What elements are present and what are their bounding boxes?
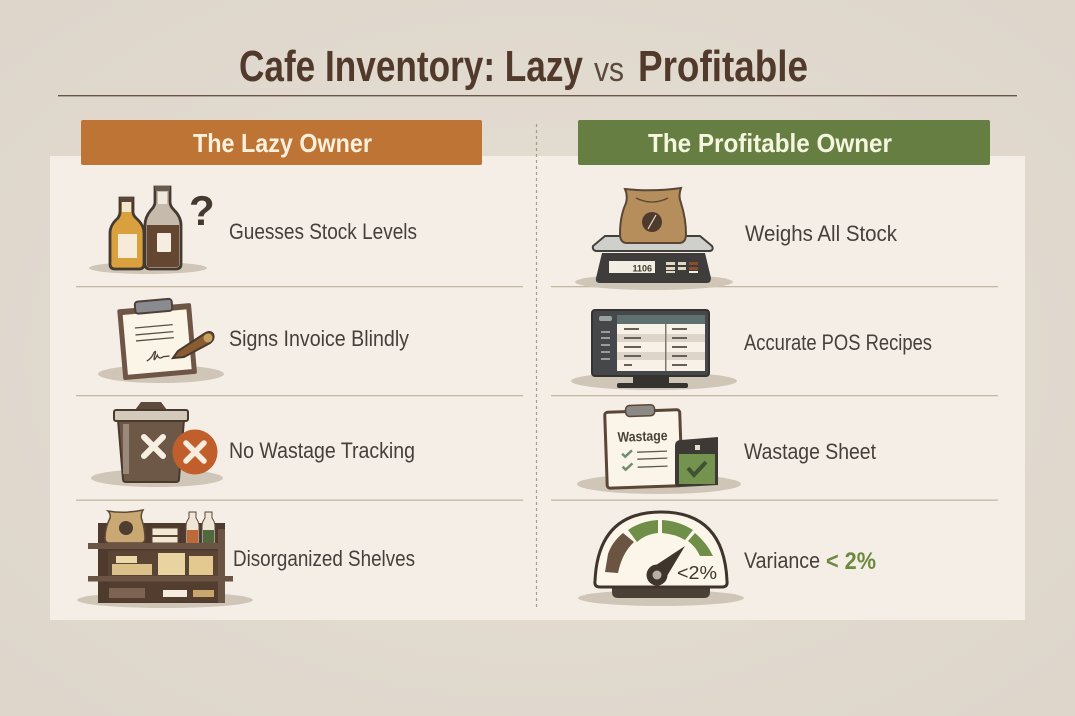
header: The Lazy Owner — [81, 120, 482, 165]
row dividers: left — [76, 286, 523, 501]
panel: content card — [50, 156, 1025, 620]
header: The Lazy Owner: The Lazy Owner — [193, 128, 372, 158]
row: Wastage Sheet — [577, 404, 876, 494]
label: No Wastage Tracking — [229, 438, 415, 463]
label — [744, 548, 876, 575]
header: The Profitable Owner: The Profitable Owner — [648, 128, 892, 158]
icon: scale with coffee bag: 1106 — [632, 264, 652, 274]
icon: trash bin with X badge — [91, 402, 223, 487]
icon: messy shelves — [77, 510, 253, 608]
label: Weighs All Stock — [745, 221, 898, 246]
title: vs — [594, 51, 624, 89]
icon: clipboard with pen — [98, 297, 224, 383]
row dividers: right — [551, 286, 998, 501]
icon: bottles with question mark: ? — [189, 187, 215, 234]
icon: POS monitor — [571, 310, 737, 390]
header: The Profitable Owner — [578, 120, 990, 165]
label: Guesses Stock Levels — [229, 219, 417, 244]
row: Disorganized Shelves — [77, 510, 415, 608]
icon: bottles with question mark — [89, 186, 215, 274]
label: Signs Invoice Blindly — [229, 326, 409, 351]
icon: gauge — [578, 512, 744, 606]
title: Cafe Inventory: Lazy — [239, 42, 583, 91]
icon: wastage clipboard and green folder: Wastage — [617, 427, 668, 445]
row: Signs Invoice Blindly — [98, 297, 409, 383]
title: Profitable — [638, 42, 808, 91]
label: Accurate POS Recipes — [744, 330, 932, 355]
center divider — [536, 124, 538, 608]
row: Guesses Stock Levels — [89, 186, 417, 274]
label: Disorganized Shelves — [233, 546, 415, 571]
label: Variance — [744, 548, 820, 573]
title rule — [58, 95, 1017, 96]
row: Accurate POS Recipes — [571, 310, 932, 390]
label: < 2% — [826, 548, 876, 575]
row: Weighs All Stock — [575, 188, 898, 290]
icon: scale with coffee bag — [575, 188, 733, 290]
row: No Wastage Tracking — [91, 402, 415, 487]
icon: wastage clipboard and green folder — [577, 404, 741, 494]
icon: gauge: <2% — [677, 563, 717, 583]
row: Variance < 2% — [578, 512, 876, 606]
label: Wastage Sheet — [744, 439, 876, 464]
